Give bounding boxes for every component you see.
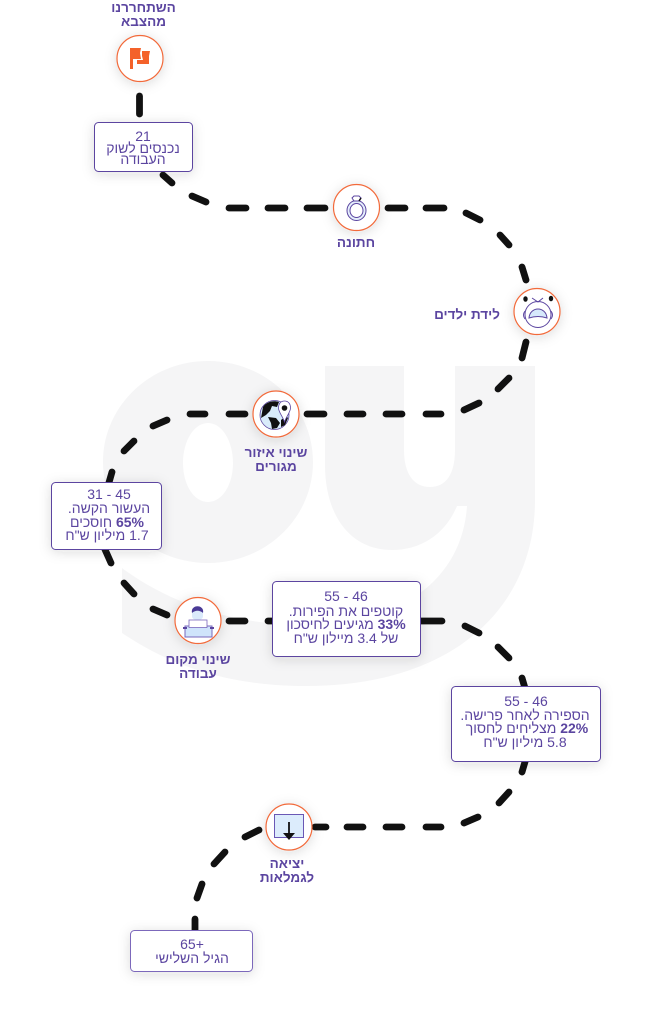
info box: ages 31-45: 1.7 מיליון ש"ח	[65, 527, 149, 543]
info box: third age: +65	[180, 936, 204, 952]
info box: third age: הגיל השלישי	[155, 950, 229, 966]
label: job change: שינוי מקום	[166, 652, 231, 667]
info box: harvest: 46 - 55	[324, 588, 368, 604]
milestone: birth of children	[434, 288, 560, 334]
info box: harvest: קוטפים את הפירות.	[289, 603, 403, 619]
info box: ages 31-45: העשור הקשה.	[68, 500, 150, 516]
info box: age 21	[94, 122, 192, 172]
icon: exit arrow	[274, 814, 304, 840]
info box: harvest	[272, 582, 420, 656]
label: retirement: לגמלאות	[260, 870, 314, 885]
milestone: wedding	[334, 184, 380, 250]
label: retirement: יציאה	[270, 856, 304, 871]
info box: countdown to retirement: הספירה לאחר פרישה.	[460, 707, 590, 723]
background logo watermark	[103, 361, 535, 686]
label: birth of children: לידת ילדים	[434, 307, 500, 322]
heading: army discharge: מהצבא	[121, 14, 166, 29]
milestone: army discharge	[111, 0, 176, 82]
info box: countdown to retirement	[452, 686, 600, 762]
heading: army discharge: השתחררנו	[111, 0, 176, 15]
info box: harvest: של 3.4 מיילון ש"ח	[294, 630, 398, 646]
info box: countdown to retirement: 5.8 מיליון ש"ח	[483, 734, 567, 750]
milestone: job change	[166, 598, 231, 681]
info box: age 21: העבודה	[120, 151, 166, 167]
icon: person at typewriter	[183, 606, 214, 637]
label: job change: עבודה	[179, 666, 217, 681]
info box: age 21: 21	[135, 128, 151, 144]
info box: harvest: 33% מגיעים לחיסכון	[286, 616, 406, 632]
icon: ring	[347, 196, 366, 220]
milestone: moving home	[245, 391, 307, 474]
label: wedding: חתונה	[337, 235, 375, 250]
icon: globe with pin	[260, 400, 290, 430]
info box: ages 31-45: 45 - 31	[87, 486, 131, 502]
info box: ages 31-45: 65% חוסכים	[70, 514, 144, 530]
info box: countdown to retirement: 22% מצליחים לחסוך	[466, 720, 588, 736]
label: moving home: שינוי איזור	[245, 445, 307, 460]
dashed life path	[103, 96, 527, 935]
icon: flag and boot	[117, 36, 163, 82]
milestone: retirement	[260, 804, 314, 885]
info box: age 21: נכנסים לשוק	[106, 140, 180, 156]
info box: countdown to retirement: 46 - 55	[504, 693, 548, 709]
info box: ages 31-45	[52, 482, 162, 550]
label: moving home: מגורים	[255, 459, 297, 474]
info box: third age	[130, 930, 252, 972]
icon: crying baby	[523, 296, 553, 328]
